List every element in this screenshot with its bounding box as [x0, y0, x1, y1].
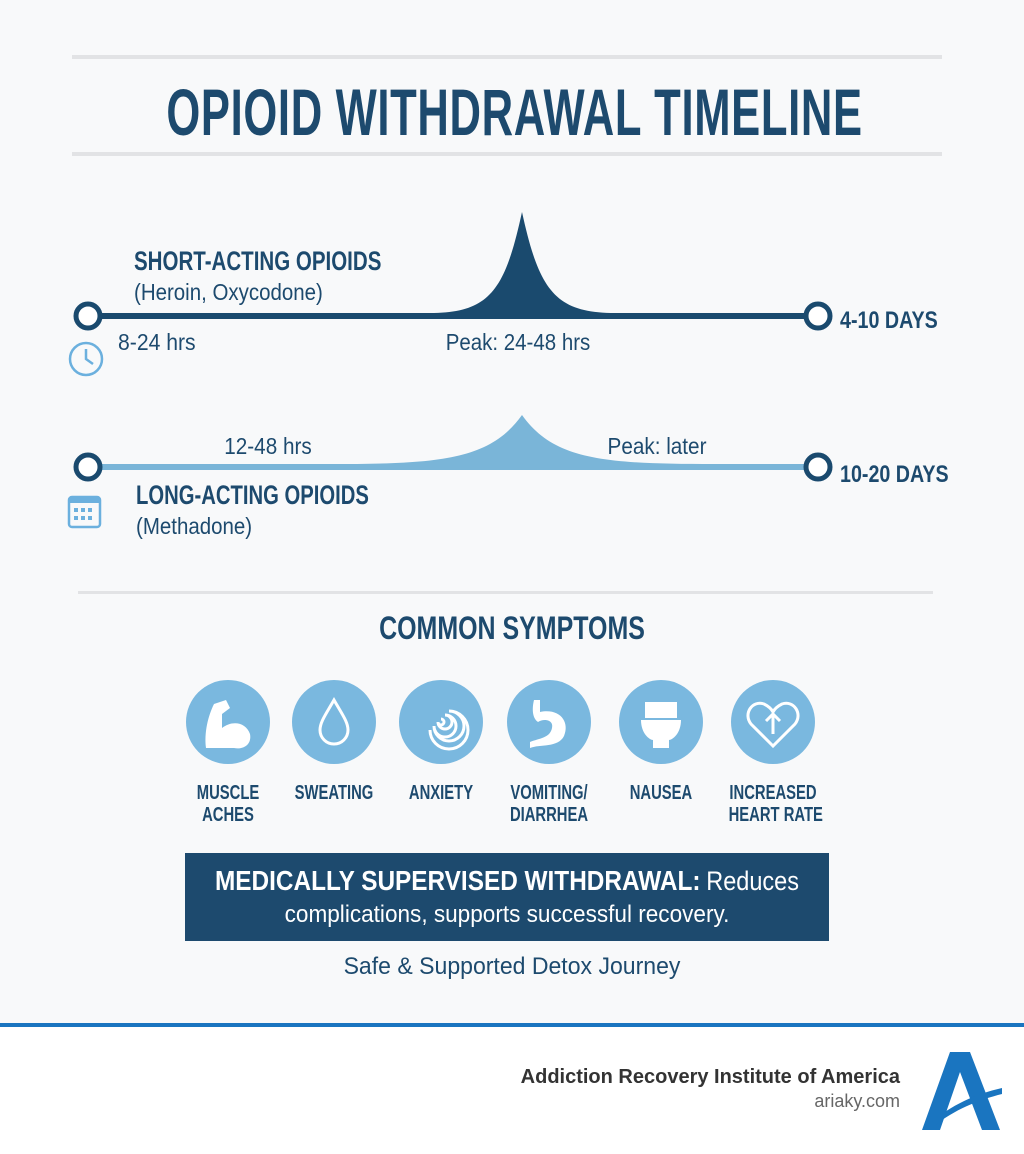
- tagline: Safe & Supported Detox Journey: [344, 953, 680, 980]
- chart: long-acting timeline: [74, 415, 832, 482]
- label: peak: Peak: 24-48 hrs: [446, 329, 590, 355]
- symptom labels: VOMITING/: [510, 782, 588, 804]
- symptom labels: NAUSEA: [630, 782, 692, 804]
- icon: clock: [68, 342, 104, 376]
- label: long-acting heading: [136, 480, 369, 539]
- footer text: [521, 1066, 900, 1111]
- label: short-acting heading: [134, 246, 381, 305]
- label: peak later: Peak: later: [608, 433, 706, 459]
- heading: common symptoms: COMMON SYMPTOMS: [379, 610, 645, 646]
- icon: calendar: [68, 496, 102, 528]
- label: long-acting heading: LONG-ACTING OPIOIDS: [136, 480, 369, 510]
- symptom labels: [197, 782, 823, 826]
- label: 10-20 days: 10-20 DAYS: [840, 461, 949, 488]
- symptom labels: INCREASED: [729, 782, 817, 804]
- label: short-acting heading: (Heroin, Oxycodone): [134, 279, 323, 305]
- label: 8-24 hrs: 8-24 hrs: [118, 329, 196, 355]
- symptom labels: ACHES: [202, 804, 254, 826]
- footer text: ariaky.com: [814, 1091, 900, 1111]
- symptom labels: HEART RATE: [729, 804, 823, 826]
- symptom icons: [186, 680, 815, 764]
- symptom labels: SWEATING: [295, 782, 373, 804]
- callout box: complications, supports successful recovery.: [285, 901, 729, 928]
- label: long-acting heading: (Methadone): [136, 513, 252, 539]
- label: 4-10 days: 4-10 DAYS: [840, 307, 938, 334]
- label: short-acting heading: SHORT-ACTING OPIOIDS: [134, 246, 381, 276]
- callout box: [185, 853, 829, 941]
- label: 12-48 hrs: 12-48 hrs: [224, 433, 312, 459]
- symptom labels: ANXIETY: [409, 782, 473, 804]
- logo: [922, 1052, 1002, 1130]
- footer text: Addiction Recovery Institute of America: [521, 1066, 900, 1088]
- chart: short-acting timeline: [74, 212, 832, 330]
- symptom labels: MUSCLE: [197, 782, 259, 804]
- callout box: MEDICALLY SUPERVISED WITHDRAWAL: Reduces: [215, 865, 799, 896]
- symptom labels: DIARRHEA: [510, 804, 588, 826]
- title: OPIOID WITHDRAWAL TIMELINE: [166, 75, 863, 149]
